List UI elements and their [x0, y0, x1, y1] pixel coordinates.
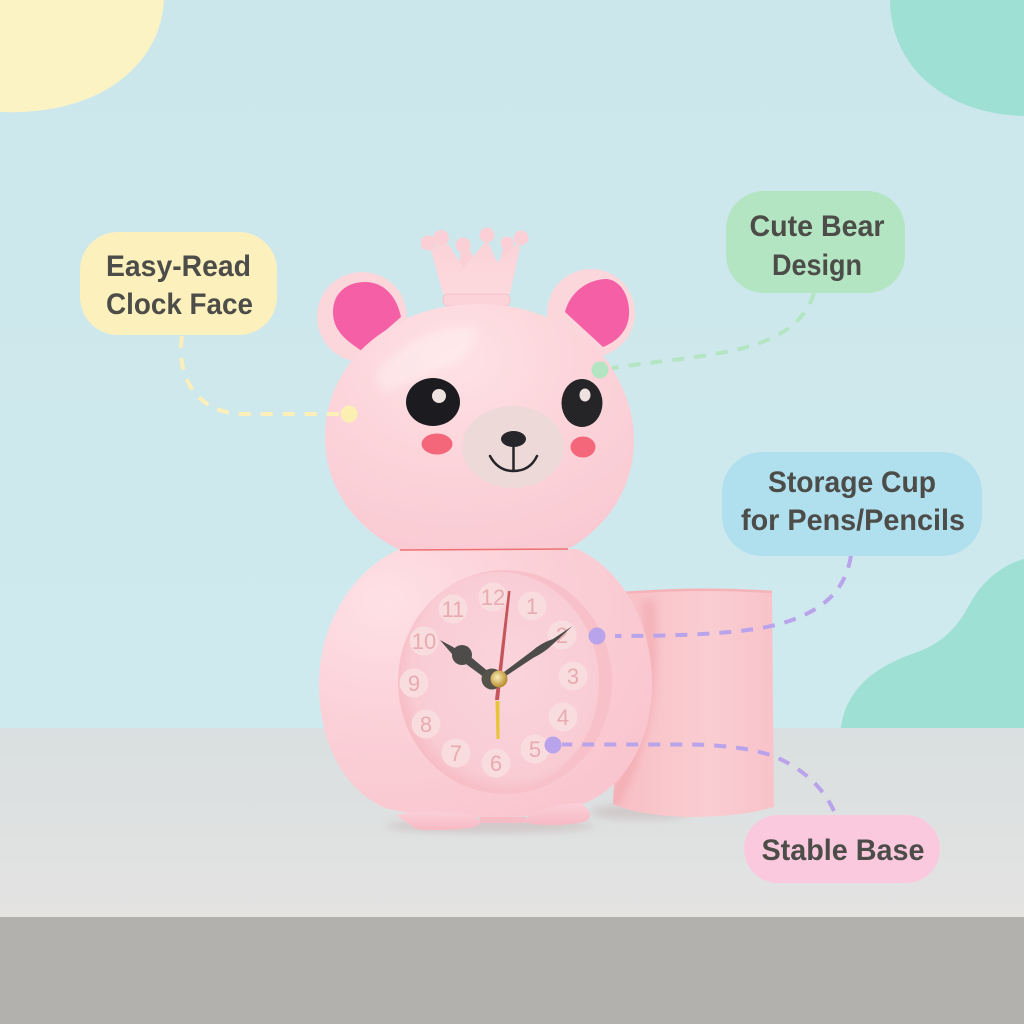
dial numerals: 8: [420, 712, 432, 737]
nose and mouth: [490, 431, 537, 471]
head shell: [325, 304, 634, 550]
yellow corner blob: [0, 0, 164, 112]
dial numerals: 1: [526, 594, 538, 619]
clock face: [399, 572, 599, 792]
clock hands: [440, 591, 572, 739]
callout: Easy-Read Clock Face: [80, 232, 277, 335]
callout: Storage Cup for Pens/Pencils: Storage Cup: [768, 466, 936, 499]
clock face recess: [398, 570, 612, 794]
cheeks: [422, 434, 596, 458]
callout: Cute Bear Design: Design: [772, 249, 862, 282]
highlight: [375, 326, 476, 395]
bear head: [317, 228, 635, 550]
right eye: [562, 379, 602, 427]
dial numerals: 12: [481, 585, 505, 610]
clock body: [319, 549, 652, 833]
feet: [396, 803, 590, 830]
callout: Stable Base: [744, 815, 940, 883]
connector: storage cup: [588, 556, 851, 644]
callout: Cute Bear Design: Cute Bear: [750, 210, 885, 243]
dial numerals: [400, 582, 588, 778]
callout: Easy-Read Clock Face: Clock Face: [106, 288, 253, 321]
wall background: [0, 0, 1024, 730]
pencil cup: [590, 590, 774, 820]
dial numerals: 10: [412, 629, 436, 654]
callout: Storage Cup for Pens/Pencils: for Pens/Pencils: [741, 504, 965, 537]
connector: easy-read: [181, 336, 358, 422]
dial numerals: 7: [450, 741, 462, 766]
left eye: [406, 378, 460, 426]
teal top-right blob: [890, 0, 1024, 116]
dial numerals: 3: [567, 664, 579, 689]
right ear: [547, 269, 635, 357]
left ear: [317, 272, 407, 362]
callout: Easy-Read Clock Face: Easy-Read: [106, 250, 251, 283]
connector: cute bear: [592, 293, 814, 378]
dial numerals: 5: [529, 737, 541, 762]
callout: Cute Bear Design: [726, 191, 905, 293]
table shadow: [385, 819, 595, 833]
table front edge: [0, 917, 1024, 1024]
teal lower-right blob: [841, 559, 1024, 728]
table top: [0, 728, 1024, 918]
callout: Storage Cup for Pens/Pencils: [722, 452, 982, 556]
dial numerals: 2: [556, 623, 568, 648]
seam: [400, 549, 568, 550]
connector: stable base: [544, 736, 834, 811]
dial numerals: 6: [490, 751, 502, 776]
body shell: [319, 549, 652, 817]
callout: Stable Base: Stable Base: [762, 834, 924, 867]
muzzle: [462, 406, 564, 488]
dial numerals: 9: [408, 671, 420, 696]
dial numerals: 11: [442, 597, 464, 622]
crown: [420, 228, 528, 306]
dial numerals: 4: [557, 705, 569, 730]
